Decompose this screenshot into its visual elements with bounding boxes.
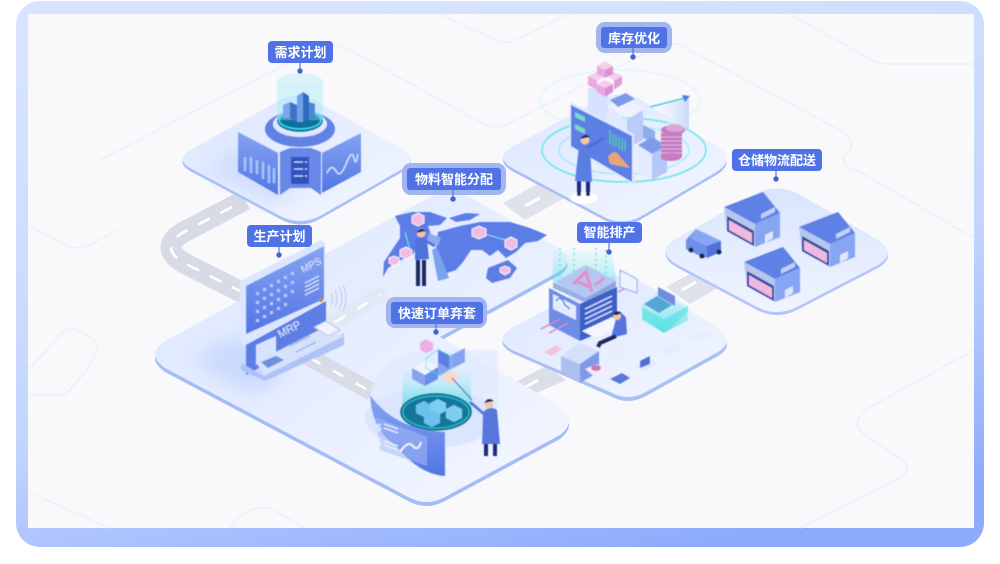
panel: warehouse platform bbox=[666, 188, 888, 315]
panel: central large platform bbox=[155, 192, 569, 506]
warehouse 2 bbox=[799, 212, 855, 267]
dashboard screen bbox=[570, 102, 634, 185]
illustration: order kitting drum bbox=[365, 339, 500, 476]
right chart panel bbox=[322, 133, 361, 193]
hologram cylinder bbox=[370, 350, 498, 441]
illustration: demand planning machine bbox=[238, 73, 361, 195]
label: warehouse logistics: 仓储物流配送 bbox=[738, 153, 816, 168]
panel: inventory platform bbox=[503, 94, 726, 224]
keyboard keys bbox=[314, 321, 340, 336]
rotary base disc bbox=[265, 111, 335, 147]
label: smart scheduling: 智能排产 bbox=[583, 225, 636, 240]
printer box bbox=[561, 343, 607, 383]
curved screen: $ bbox=[376, 437, 382, 448]
data rain dots bbox=[560, 248, 606, 278]
MPS screen bbox=[240, 240, 325, 345]
illustration: MPS MRP terminal bbox=[240, 240, 346, 381]
pointer line bbox=[452, 378, 472, 400]
presenter figure bbox=[415, 228, 449, 286]
engineer figure bbox=[470, 399, 500, 456]
map connectors bbox=[392, 232, 512, 260]
curved screen: $ bbox=[376, 423, 382, 434]
panel: scheduling platform bbox=[502, 276, 727, 401]
glowing laptop bbox=[642, 287, 688, 333]
MPS screen: MPS bbox=[299, 256, 324, 276]
illustration: world map bbox=[383, 212, 547, 286]
road: order to scheduling bbox=[510, 366, 566, 396]
pink nodes bbox=[389, 213, 517, 275]
illustration: inventory optimisation bbox=[540, 61, 706, 204]
pulse rings bbox=[540, 70, 706, 182]
road: across the central platform bbox=[300, 292, 385, 392]
warehouse 1 bbox=[724, 192, 780, 247]
label: fast order kitting bbox=[386, 297, 487, 335]
label: smart scheduling bbox=[577, 222, 642, 255]
wifi waves bbox=[331, 285, 346, 311]
pink data slats bbox=[541, 276, 632, 333]
small wall screen bbox=[620, 270, 637, 293]
centre server panel bbox=[280, 148, 321, 195]
teal disc bbox=[400, 393, 472, 431]
label: demand planning bbox=[268, 41, 333, 74]
label: production planning bbox=[247, 225, 312, 258]
cyan light beam bbox=[402, 372, 472, 410]
curved screen bbox=[370, 395, 445, 476]
green data rain bbox=[552, 250, 616, 298]
road: scheduling to warehouse bbox=[666, 265, 728, 304]
AI cube bbox=[549, 265, 617, 341]
floating boxes bbox=[412, 339, 465, 386]
pink cubes bbox=[588, 61, 622, 97]
warehouse 3 bbox=[744, 247, 800, 302]
road: planning loop bbox=[171, 200, 300, 322]
MRP console bbox=[241, 301, 344, 381]
label: inventory optimisation: 库存优化 bbox=[608, 31, 660, 46]
label: demand planning: 需求计划 bbox=[274, 45, 327, 60]
delivery truck bbox=[686, 229, 722, 258]
desk devices bbox=[525, 330, 712, 384]
illustration: warehouses bbox=[686, 192, 855, 302]
label: material allocation: 物料智能分配 bbox=[415, 172, 493, 187]
road: materials to inventory bbox=[503, 181, 566, 220]
left data panel bbox=[238, 132, 278, 195]
label: warehouse logistics bbox=[732, 149, 822, 182]
illustration: AI scheduling station bbox=[525, 248, 712, 384]
stacked stock columns bbox=[588, 88, 667, 180]
trend arrow bbox=[650, 95, 690, 131]
label: production planning: 生产计划 bbox=[253, 229, 306, 244]
label: inventory optimisation bbox=[596, 22, 672, 60]
seated operator bbox=[582, 311, 630, 366]
label: fast order kitting: 快速订单弃套 bbox=[398, 306, 476, 321]
sensor dot bbox=[319, 298, 323, 302]
continents bbox=[383, 212, 547, 283]
analyst figure bbox=[570, 135, 604, 204]
MRP console: MRP bbox=[276, 319, 303, 341]
panel: demand planning platform bbox=[182, 96, 411, 224]
glass cylinder with city bbox=[277, 73, 323, 122]
label: material allocation bbox=[402, 163, 506, 202]
coin stack bbox=[660, 124, 685, 161]
